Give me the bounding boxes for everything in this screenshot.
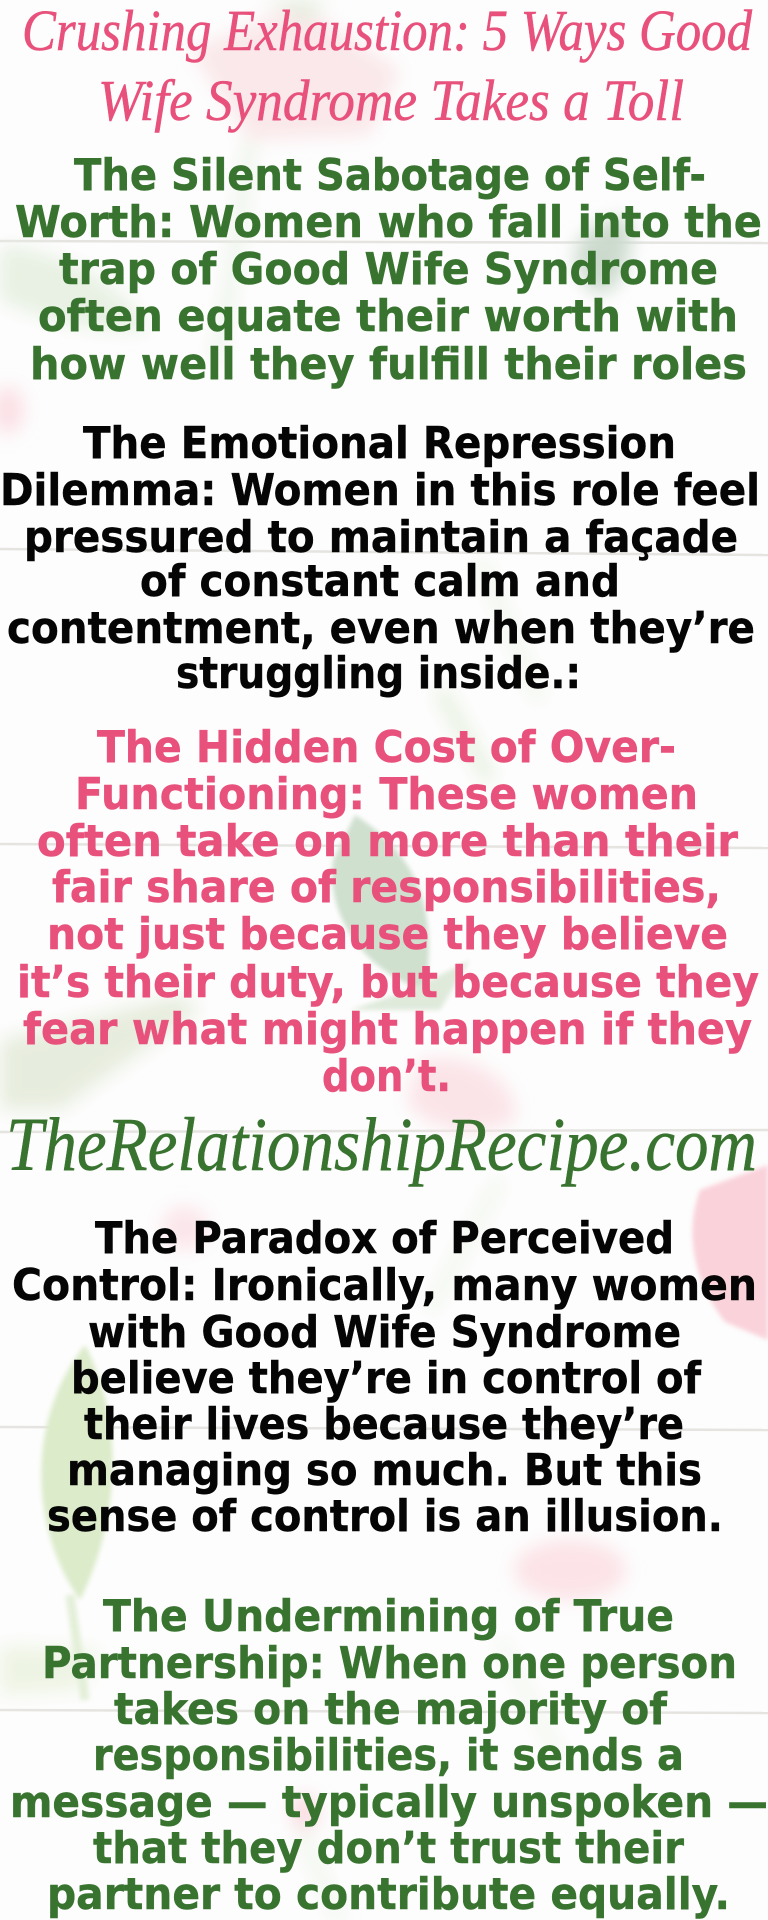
text block: paradox of perceived control: believe they’re in control of [71,1353,702,1404]
text block: undermining of true partnership [10,1591,768,1920]
title: Wife Syndrome Takes a Toll [98,68,684,133]
text block: emotional repression dilemma: The Emotional Repression [83,418,676,469]
text block: undermining of true partnership: that they don’t trust their [93,1823,684,1874]
text block: emotional repression dilemma: struggling inside.: [176,648,581,699]
text block: hidden cost of over-functioning: often take on more than their [37,816,738,867]
text block: paradox of perceived control: The Paradox of Perceived [95,1213,674,1264]
text block: paradox of perceived control: managing so much. But this [67,1445,702,1496]
text block: silent sabotage of self-worth [15,150,762,390]
text block: hidden cost of over-functioning: Functioning: These women [75,769,698,820]
text block: undermining of true partnership: responsibilities, it sends a [93,1730,684,1781]
text block: paradox of perceived control [12,1213,757,1542]
text block: hidden cost of over-functioning: don’t. [322,1051,451,1102]
text block: silent sabotage of self-worth: how well they fulfill their roles [30,339,747,390]
text block: undermining of true partnership: takes on the majority of [114,1684,668,1735]
text block: hidden cost of over-functioning: The Hidden Cost of Over- [97,722,676,773]
title [22,0,753,133]
text block: silent sabotage of self-worth: often equate their worth with [38,291,738,342]
text block: silent sabotage of self-worth: The Silent Sabotage of Self- [74,150,706,201]
text block: undermining of true partnership: The Undermining of True [103,1591,674,1642]
text block: hidden cost of over-functioning: not just because they believe [47,909,728,960]
text block: silent sabotage of self-worth: trap of Good Wife Syndrome [59,244,718,295]
text block: hidden cost of over-functioning: fair share of responsibilities, [52,862,721,913]
text block: undermining of true partnership: partner to contribute equally. [47,1869,730,1920]
text block: hidden cost of over-functioning [17,722,759,1102]
text block: paradox of perceived control: their lives because they’re [84,1399,684,1450]
text block: paradox of perceived control: with Good Wife Syndrome [88,1307,681,1358]
text block: emotional repression dilemma [0,418,760,699]
text block: emotional repression dilemma: of constant calm and [140,556,620,607]
